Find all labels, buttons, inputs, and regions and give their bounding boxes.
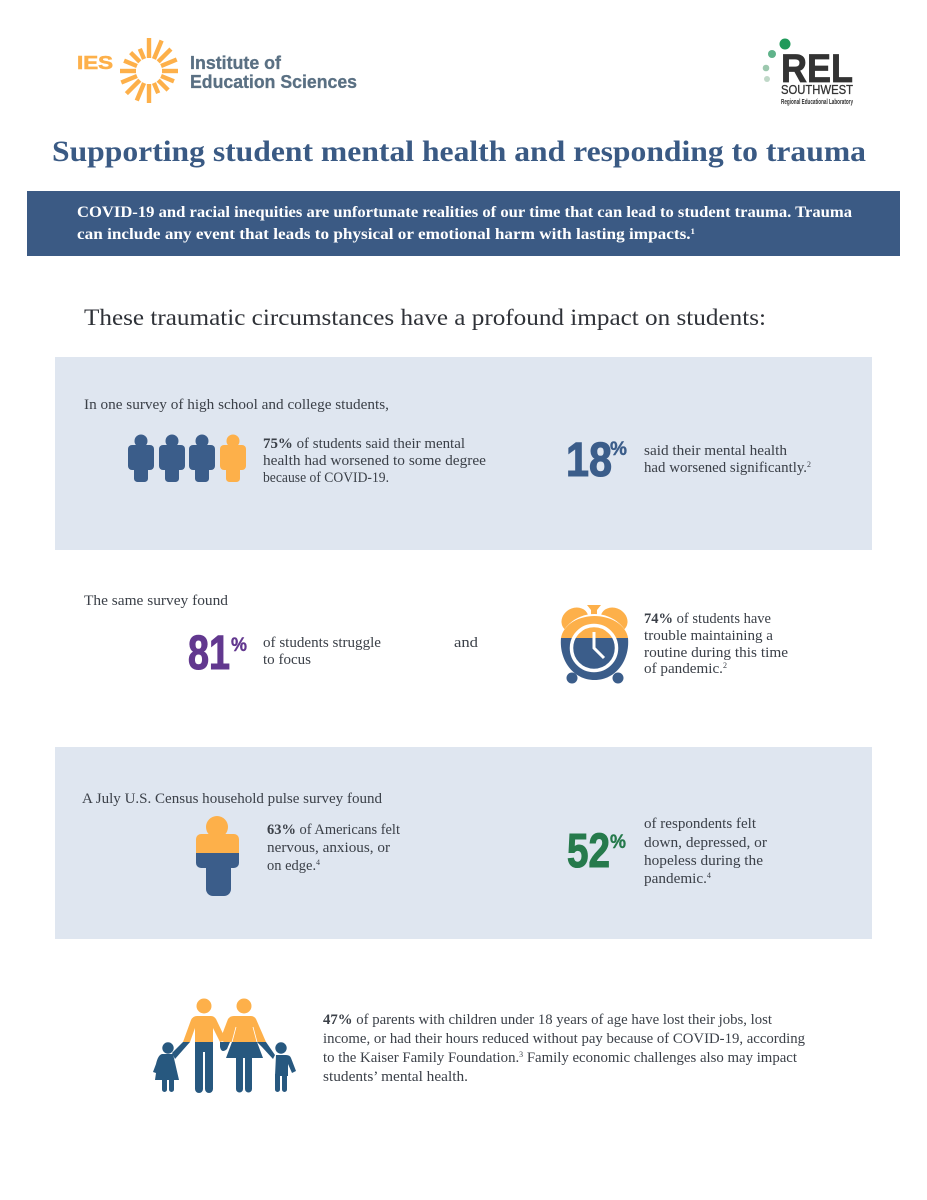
icon: sun [120,38,178,103]
woman [220,998,275,1093]
stat: 18%: % [610,439,627,460]
logo: REL Southwest [763,38,853,106]
stat text: 52%: hopeless during the [644,853,763,869]
icon: alarm clock [557,603,632,684]
stat: 52%: 52 [567,825,610,878]
stat text: 18%: said their mental health [644,443,788,459]
stat text: 18%: 2 [807,460,811,469]
girl [153,1042,179,1092]
panel: Census pulse survey [55,747,872,939]
stat text: 47% of parents: students’ mental health. [323,1069,468,1085]
stat text: 52% [644,816,767,887]
stat: 52%: % [610,832,626,853]
banner: can include any event that leads to physical or emotional harm with lasting impacts. [77,226,630,243]
stat text: 52%: of respondents felt [644,816,757,832]
survey intro text: The same survey found [84,593,228,609]
stat text: 81% [263,635,381,668]
stat: 81%: 81 [188,627,230,680]
stat text: 63%: nervous, anxious, or [267,840,390,856]
stat: 81%: % [231,635,247,656]
stat: 18%: 18 [566,434,612,487]
icon: four people [128,434,246,482]
stat text: 74%: 74% of students have [644,611,771,627]
stat text: 63% [267,822,401,874]
panel: COVID-19 survey [55,357,872,550]
stat text: 81%: of students struggle [263,635,381,651]
stat text: 47% of parents: 3 [519,1050,523,1059]
stat text: 74%: 2 [723,661,727,670]
logo: Institute of Education Sciences: Institute of [190,53,282,73]
logo: REL Southwest: REL [781,47,853,91]
stat text: 47% of parents [323,1012,805,1085]
stat text: 63%: 4 [316,858,320,867]
stat text: 18% [644,443,811,476]
stat text: 74% [644,611,788,677]
stat text: 47% of parents: income, or had their hours reduced without pay because of COVID-19, according [323,1031,805,1047]
title: Supporting student mental health and responding to trauma [52,135,866,168]
stat text: 47% of parents: to the Kaiser Family Foundation. [323,1050,522,1066]
banner: COVID-19 and racial inequities are unfortunate realities of our time that can lead to student trauma. Trauma [77,204,852,221]
stat text: 52%: pandemic. [644,871,706,887]
stat text: 75%: health had worsened to some degree [263,453,486,469]
section heading: These traumatic circumstances have a profound impact on students: [84,305,766,330]
stat text: 63%: 63% of Americans felt [267,822,401,838]
man [172,998,226,1093]
logo: REL Southwest: Regional Educational Laboratory [781,99,853,106]
logo: Institute of Education Sciences [77,38,357,103]
connector word: and [454,635,479,651]
stat text: 75% [263,436,486,486]
survey intro text: A July U.S. Census household pulse survey found [82,791,382,807]
stat text: 74%: routine during this time [644,645,788,661]
survey intro text: In one survey of high school and college students, [84,397,389,413]
stat text: 81%: to focus [263,652,311,668]
stat text: 47% of parents: Family economic challenges also may impact [523,1050,798,1066]
stat text: 52%: 4 [707,871,711,880]
logo: Institute of Education Sciences: IES [77,53,113,73]
section: same survey [84,593,788,684]
icon: family [153,998,296,1093]
stat text: 52%: down, depressed, or [644,835,767,851]
stat text: 74%: of pandemic. [644,661,722,677]
stat text: 63%: on edge. [267,858,318,874]
stat text: 47% of parents: 47% of parents with children under 18 years of age have lost their jobs, lost [323,1012,773,1028]
logo: Institute of Education Sciences: Education Sciences [190,72,357,92]
boy [275,1042,296,1092]
icon: person [196,816,239,896]
banner [27,191,900,256]
banner: 1 [691,227,695,236]
stat text: 74%: trouble maintaining a [644,628,773,644]
stat text: 75%: because of COVID-19. [263,470,389,486]
logo: REL Southwest: SOUTHWEST [781,82,853,97]
stat text: 18%: had worsened significantly. [644,460,808,476]
stat text: 75%: 75% of students said their mental [263,436,465,452]
